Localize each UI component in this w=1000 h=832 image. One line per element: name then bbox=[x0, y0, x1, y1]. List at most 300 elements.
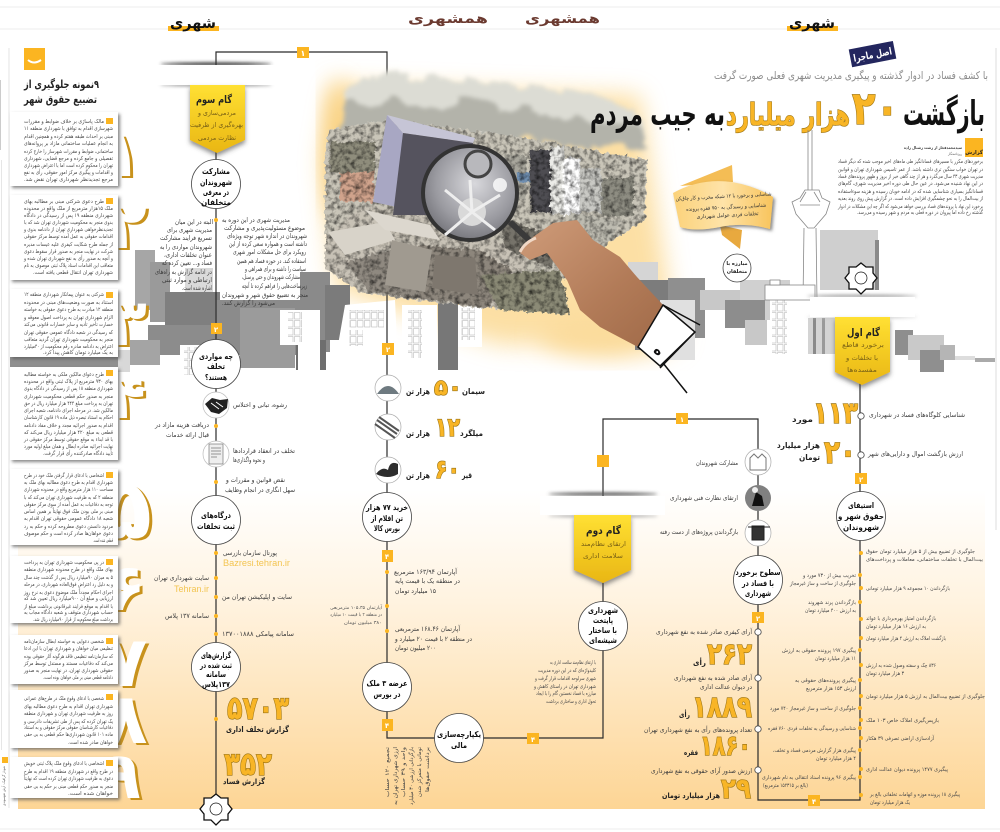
badge on bottom rail: ۴ bbox=[531, 736, 536, 744]
list: right column, left of rail: تخریب بیش از ۷۳۰ مورد و bbox=[802, 573, 856, 579]
list: right column, right of rail: بازپس‌گیری املاک خاص ۱۰۳ ملک bbox=[866, 717, 939, 724]
stats: step one: ۱۱۳ bbox=[813, 396, 858, 431]
card 6: با اقدام به موقع فرایند غیرقانونی برداشت مبلغ از bbox=[23, 604, 113, 610]
list: portals: سامانه پیامکی ۱۳۷۰۰۱۸۸۸ bbox=[222, 630, 294, 638]
card 3: که رسیدگی در شعبه دادگاه عمومی حقوقی تهران bbox=[24, 329, 113, 336]
icon: handshake bbox=[203, 392, 229, 418]
card 9 bbox=[10, 757, 118, 798]
label: law breaches bbox=[214, 476, 295, 494]
circle: glass municipality: پایتخت bbox=[593, 616, 613, 625]
card 7 bbox=[10, 635, 118, 684]
card 2: اقدامات حقوقی به عمل آمده توسط مرکز حقوقی bbox=[24, 233, 113, 240]
stats: step one: هزار میلیارد bbox=[777, 441, 820, 450]
text block: left of rail: تسریع فرایند مشارکت bbox=[160, 234, 212, 242]
band and banner: step one: گام اول bbox=[847, 326, 881, 339]
report intro: گزارش bbox=[965, 149, 983, 156]
badge: ۴ bbox=[385, 722, 390, 730]
list: right column, right of rail: آزادسازی اراضی تصرفی ۳۹ هکتار bbox=[865, 735, 934, 742]
list: apartments: در منطقه ۲ با قیمت ۱۰ میلیارد bbox=[330, 612, 382, 618]
card 8: خواهان صادر شده است. bbox=[68, 740, 113, 746]
safe bbox=[373, 115, 403, 207]
list: right column, left of rail: پیگیری پرونده‌های حقوقی به bbox=[795, 677, 856, 684]
headline bbox=[590, 81, 985, 135]
list: right column, right of rail: به ارزش ۱۶ هزار میلیارد تومان bbox=[866, 624, 926, 630]
circle: citizens' participation: شهروندان bbox=[200, 178, 232, 187]
card 6: حساب شهرداری متوقف و شعبه دادگاه مجاب به bbox=[24, 609, 113, 616]
circle: restoring rights: حقوق شهر و bbox=[837, 512, 884, 521]
card 4: منجر به صدور حکم قطعی محکومیت شهرداری bbox=[24, 393, 113, 400]
list: apartments: آپارتمان ۱۶۳/۹۴ مترمربع bbox=[394, 567, 458, 576]
circle: levels of confronting corruption: با فساد در bbox=[741, 579, 774, 588]
big outlined digits behind cards: ۸ bbox=[105, 678, 147, 760]
big outlined digits behind cards: ۴ bbox=[109, 363, 145, 433]
list: right column, left of rail: جلوگیری از ساخت و ساز غیرمجاز ۷۴۰ مورد bbox=[770, 705, 856, 712]
circle: financial integration: مالی bbox=[451, 741, 467, 750]
card 2: و آنچه به صدور رأی به نفع شهرداری تهران شده و bbox=[23, 254, 113, 262]
circle: citizens' participation bbox=[192, 160, 240, 208]
list: apartments bbox=[330, 567, 472, 652]
card 6: در پی محکومیت شهرداری تهران به پرداخت bbox=[24, 559, 104, 566]
list: right column, left of rail: (بالغ بر ۱۵۲۳۱۵ مترمربع) bbox=[763, 783, 808, 789]
stats: court rulings: ۲۶۲ bbox=[707, 637, 752, 672]
row: rebar: میلگرد bbox=[460, 428, 483, 438]
card 1: شهرسازی اقدام به توافق با شهرداری منطقه ۱۱ bbox=[24, 126, 113, 132]
list: portals: سایت و اپلیکیشن تهران من bbox=[222, 593, 292, 601]
text block: step two: با ارتقای نظام‌مند سلامت اداری به bbox=[550, 660, 596, 666]
yellow ribbon callout: شناسایی و برخورد با ۱۲ شبکه مخرب و کار چاق‌کن bbox=[675, 191, 772, 202]
circle: purchase from commodity exchange: تن اقلام از bbox=[370, 514, 403, 523]
stats: step one bbox=[777, 396, 965, 471]
tag: the main story bbox=[849, 41, 896, 67]
label: bribery: رشوه، تبانی و اختلاس bbox=[233, 401, 287, 409]
list: right column, left of rail: پیگیری ۹۶ پرونده اسناد انتقالی به نام شهرداری bbox=[762, 774, 856, 781]
card 9: خواهان شده است. bbox=[68, 791, 113, 797]
card 5: منطقه ۲ که به ظرفیت شهرداری تهران می‌کند که با bbox=[24, 494, 113, 501]
text block: right of rail: می‌شود را گزارش کنند. bbox=[222, 299, 275, 307]
top middle rail badge: ۱ bbox=[680, 416, 684, 424]
card 3 bbox=[10, 289, 118, 357]
yellow ribbon callout bbox=[673, 165, 773, 249]
circle: reporting portals: درگاه‌های bbox=[201, 510, 231, 520]
list: right column, left of rail: پیگیری ۱۹۷ پرونده حقوقی به ارزش bbox=[782, 647, 856, 654]
big outlined digits behind cards: ۹ bbox=[104, 741, 144, 816]
list: right column, left of rail: ۱۱ هزار میلیارد تومان bbox=[815, 656, 856, 662]
card 3: استناد به صورت وضعیت‌های مبنی در محدوده bbox=[24, 300, 113, 306]
circle: registered reports: ثبت شده در bbox=[199, 661, 232, 670]
rotated text: بازگردانی ارزشی ۳۰ میلیارد bbox=[408, 747, 415, 805]
card 1: به انجام عملیات ساختمانی مازاد بر پروانه‌های bbox=[24, 141, 113, 147]
card 2: شهرداری منطقه ۱۹ پس از رسیدگی در دادگاه bbox=[24, 212, 113, 219]
hand bbox=[520, 220, 663, 347]
list: apartments: در منطقه یک با قیمت پایه bbox=[395, 577, 460, 585]
text block: step two: تحول اداری و ساختاری برداشت bbox=[546, 699, 596, 705]
card 1: تهران را محکوم کرده است اما با اعتراض شهرداری bbox=[24, 162, 113, 169]
card 7: دادنامه قطعی مبنی بر ملی خواهان بوده است. bbox=[43, 675, 113, 681]
big outlined digits behind cards: ۲ bbox=[110, 191, 150, 266]
list: right column, left of rail: بازگرداندن پرند شهروند bbox=[808, 599, 856, 606]
skyline: white foreground left bbox=[180, 300, 482, 378]
text block: step two: شهری سرلوحه اقدامات قرار گرفت و bbox=[534, 675, 596, 682]
stats: court rulings: رأی bbox=[679, 709, 690, 719]
top middle rail badge bbox=[676, 413, 688, 424]
text block: left of rail: اشاره شده است. bbox=[182, 284, 212, 292]
row: cement bbox=[375, 375, 485, 401]
label: extra fee: قبال ارائه خدمات bbox=[166, 431, 209, 439]
card 4: طرح دعوای مالکین ملکی به خواسته مطالبه bbox=[24, 371, 104, 378]
row: cement: هزار تن bbox=[406, 387, 430, 396]
stats: court rulings: در دیوان عدالت اداری bbox=[700, 683, 752, 691]
card 1: مالک پاساژی بر خلاف ضوابط و مقررات bbox=[24, 118, 104, 125]
list: apartments: ۳۸۰ میلیون تومان bbox=[344, 620, 382, 626]
report intro: سیدمحمدفخار از رشت رشتال زاده bbox=[904, 145, 962, 150]
card 1: مرجع تجدیدنظر شهرداری تهران نقض شد. bbox=[24, 177, 113, 183]
stats: court rulings: آرای کیفری صادر شده به نفع شهرداری bbox=[656, 627, 753, 636]
magnifier bbox=[423, 146, 545, 255]
icon: yellow square bbox=[24, 48, 45, 70]
list: right column, right of rail: جلوگیری از تضییع بیت‌المال به ارزش ۵ هزار میلیارد تومان bbox=[866, 693, 985, 700]
card 2: ملک ۱۵هزار مترمربع از ملک واقع در محدوده bbox=[24, 205, 113, 212]
stat: 352 corruption reports: ۳۵۲ bbox=[224, 745, 272, 783]
list: right column, right of rail: بیت‌المال با تخلفات ساختمانی، معاملات و پرداخت‌های bbox=[866, 557, 983, 563]
circle: restoring rights: استیفای bbox=[848, 501, 874, 510]
circle: registered reports: سامانه bbox=[206, 670, 226, 679]
card 3: خسارت تأخیر تأدیه و سایر خسارات قانونی می‌کند bbox=[24, 320, 113, 328]
card 4: با قد ابداء به موقع حقوقی توسط مرکز حقوقی در bbox=[23, 436, 113, 443]
glow behind collage bbox=[322, 80, 680, 357]
card 2: طرح دعوی شرکتی مبنی بر مطالبه بهای bbox=[24, 198, 104, 205]
stats: step one: شناسایی کلوگاه‌های فساد در شهرداری bbox=[869, 411, 965, 419]
label: contracts: تخلف در انعقاد قراردادها bbox=[233, 447, 295, 455]
text block: right of rail: مشارکت شهروندان و حتی پرسنل، bbox=[242, 273, 300, 281]
text block: step two bbox=[533, 660, 596, 705]
text block: right of rail: موضوع مسئولیت‌پذیری و مشارکت bbox=[224, 224, 305, 232]
report intro bbox=[837, 138, 983, 216]
yellow ribbon callout: شناسایی و رسیدگی به ۷۵۰ فقره پرونده bbox=[686, 202, 766, 213]
text block: right of rail: داشته است و همواره سعی کرده از این bbox=[229, 240, 307, 248]
card 1: و اقدامات و پیگیری مرکز امور حقوقی، رأی به نفع bbox=[24, 168, 113, 176]
circle: registered reports: گزارش‌های bbox=[201, 650, 231, 661]
skyline: centre and right bbox=[628, 230, 995, 372]
stats: court rulings: ۲۹ bbox=[721, 772, 751, 805]
row: cement: سیمان bbox=[462, 387, 485, 396]
card 6: ارزیابی و مبلغ آن ۹۰۰میلیارد ریال تعیین شد که bbox=[24, 595, 113, 602]
big outlined digits behind cards: ۵ bbox=[100, 460, 152, 559]
band and banner: step one: مفسده‌ها bbox=[847, 366, 877, 374]
big outlined digits behind cards: ۷ bbox=[108, 623, 150, 705]
circle: what are violations: تخلف bbox=[207, 362, 225, 371]
card 2: بدوی منجر به محکومیت شهرداری تهران شد که با bbox=[24, 219, 113, 226]
circle: glass municipality: شهرداری bbox=[588, 606, 618, 615]
text block: right of rail: منجر به تضییع حقوق شهر و شهروندان bbox=[222, 291, 308, 299]
icon: municipality logo top bbox=[845, 263, 877, 294]
row: rebar bbox=[375, 413, 483, 443]
circle: three properties on exchange bbox=[362, 662, 412, 712]
stats: court rulings: هزار میلیارد تومان bbox=[662, 791, 720, 800]
band and banner: step two: سلامت اداری bbox=[583, 552, 623, 560]
card 8: شهرداری تهران اقدام به طرح دعوی مطالبه بهای bbox=[24, 704, 113, 710]
stats: court rulings: ۱۸۸۹ bbox=[692, 690, 752, 725]
stats: court rulings: ارزش صدور آرای حقوقی به نفع شهرداری bbox=[651, 766, 752, 775]
connector rail bbox=[216, 52, 860, 810]
text block: right of rail: مدیریت شهری در این دوره به bbox=[222, 216, 290, 224]
crisp house roofs bbox=[328, 222, 395, 255]
card 5: دعوی خواهان‌ها صادر کرده است و حکم موصوف bbox=[24, 530, 113, 537]
card 4: بهای ۹۳۰ مترمربع از پلاک ثبتی واقع در محدوده bbox=[24, 378, 113, 385]
text block: left of rail: مدیریت شهری برای bbox=[167, 226, 212, 234]
stat: 5703 administrative violations: ۵۷۰۳ bbox=[227, 689, 289, 727]
title block bbox=[590, 41, 988, 135]
panel: nine examples bbox=[10, 48, 118, 798]
list: apartments: ۲۰۰ میلیون تومان bbox=[395, 644, 436, 652]
list: apartments: در منطقه ۲ با قیمت ۲۰ میلیارد و bbox=[394, 635, 472, 643]
page header strip: شهری bbox=[789, 14, 835, 32]
card 1: مبنی بر احداث طبقه هفتم کرده و همچنین اقدام bbox=[24, 133, 113, 140]
text block: right of rail: استفاده کند. در حوزه فساد هم همین bbox=[237, 257, 306, 265]
card 6: برداشت مبلغ محکوم‌به از قرار ۹۰میلیارد ریال شد. bbox=[33, 616, 113, 623]
card 5: شعبه ۱۸ دادگاه عمومی حقوقی تهران اقدام به bbox=[24, 515, 113, 522]
icon: Milad tower bbox=[765, 130, 830, 300]
text block: step two: شهرداری تهران در راستای کاهش و bbox=[533, 683, 596, 690]
badge bbox=[855, 473, 867, 484]
text block: left of rail bbox=[155, 218, 218, 292]
badge: ۴ bbox=[385, 553, 390, 561]
bottom right badge: ۴ bbox=[812, 798, 817, 806]
skyline: left bbox=[10, 250, 350, 372]
card 5 bbox=[10, 469, 118, 545]
list: right column, left of rail: شناسایی و رسیدگی به تخلفات فردی ۷۶۰ فقره bbox=[768, 725, 856, 732]
card 4 bbox=[10, 367, 118, 460]
row: bitumen: ۶۰ bbox=[435, 455, 460, 485]
circle: what are violations bbox=[192, 340, 240, 388]
band and banner: step one bbox=[807, 295, 917, 385]
left margin strip bbox=[0, 48, 9, 808]
card 9: در طرح واقع در شهرداری منطقه ۱۹ اقدام به طرح bbox=[24, 769, 113, 775]
band and banner: step three: گام سوم bbox=[196, 93, 233, 106]
text block: left of rail: البته در این میان bbox=[175, 218, 213, 226]
row: cement: ۵۰ bbox=[434, 376, 462, 401]
card 1 bbox=[10, 112, 118, 186]
heading: nine examples: ۹نمونه جلوگیری از bbox=[23, 78, 99, 91]
card 7: می‌کند که دفاعیات مستند و مستدل توسط مرکز bbox=[23, 660, 113, 667]
list: right column, right of rail bbox=[859, 548, 985, 806]
band and banner: step three: مردمی‌سازی و bbox=[197, 109, 236, 117]
photo collage: city, safe, magnifier, hand bbox=[325, 72, 700, 393]
text block: right of rail bbox=[222, 216, 308, 307]
big outlined digits behind cards: ۷ bbox=[105, 621, 147, 703]
circle: what are violations: هستند؟ bbox=[205, 373, 227, 382]
card 6: اجرای احکام مجدداً ملک موضوع دعوی به نرخ روز bbox=[23, 588, 113, 596]
list: right column, left of rail: ۴ هزار میلیارد تومان bbox=[816, 756, 856, 762]
stat: 352 corruption reports: گزارش فساد bbox=[223, 777, 266, 786]
list: right column, right of rail: بازگشت املاک به ارزش ۴ هزار میلیارد تومان bbox=[866, 635, 946, 642]
text block: right of rail: زیرساخت‌هایی را فراهم کرده تا آنچه bbox=[242, 281, 307, 290]
rotated text: تومانی با متمرکز شدن bbox=[416, 747, 423, 797]
card 2: تجدیدنظرخواهی شهرداری تهران از دادنامه بدوی و bbox=[23, 227, 113, 233]
circle: levels of confronting corruption: شهرداری bbox=[745, 589, 771, 598]
card 9: منجر به صدور حکم قطعی مبنی بر حکم به بی حقی bbox=[24, 783, 113, 790]
card 4: شهرداری منطقه ۱۸ پس از رسیدگی در دادگاه بدوی bbox=[24, 385, 113, 392]
text block: left of rail: در ادامه گزارش به راه‌های bbox=[155, 268, 212, 276]
card 6: و به دلیل رد اعتراض فوق‌العاده شهرداری، در مرحله bbox=[24, 582, 113, 588]
card 8 bbox=[10, 690, 118, 748]
top rail badge bbox=[297, 47, 309, 58]
heading: nine examples bbox=[23, 78, 99, 106]
icons and labels: municipal oversight: ارتقای نظارت فنی شهرداری bbox=[670, 494, 738, 502]
textured city bbox=[325, 120, 648, 315]
band and banner: step three bbox=[150, 62, 280, 153]
stats: step one: ارزش بازگشت اموال و دارایی‌های شهر bbox=[867, 450, 963, 458]
stats: court rulings: رأی bbox=[693, 657, 706, 667]
circle: fighting offenders: متخلفان bbox=[727, 269, 747, 275]
report intro: مدیریت شهری ۴۳ سال می‌گذرد و هر از چند گاهی خبر از بروز و ظهور پرونده‌های فساد bbox=[838, 173, 983, 180]
badge bbox=[382, 550, 393, 562]
circle: purchase from commodity exchange bbox=[362, 492, 412, 542]
badge on bottom rail bbox=[527, 733, 539, 744]
band and banner: step two: ارتقای نظام‌مند bbox=[581, 540, 626, 548]
big outlined digits behind cards: ۸ bbox=[108, 680, 150, 762]
circle: reporting portals bbox=[192, 496, 240, 544]
list: apartments: ۱۵ میلیارد تومان bbox=[395, 587, 436, 595]
stats: step one: ۲۰ bbox=[824, 433, 856, 471]
icon: municipality logo bbox=[200, 794, 232, 825]
card 5: مردود دانستن دعوی مطروحه کرده و حکم به رد bbox=[24, 523, 113, 530]
card 3: منجر به محکومیت شهرداری تهران گردید متعاقب bbox=[24, 336, 113, 343]
stats: court rulings: ۱۸۶۰ bbox=[700, 729, 751, 762]
card 6: ۵ به میزان ۹۰میلیارد ریال پس از گذشت چند سال bbox=[24, 574, 113, 581]
circle: financial integration: یکپارچه‌سازی bbox=[437, 730, 481, 739]
stats: court rulings: آرای صادر شده به نفع شهرداری bbox=[674, 673, 753, 682]
sleeve bbox=[638, 305, 700, 393]
list: portals: سایت شهرداری تهران bbox=[154, 574, 209, 582]
band and banner: step two: گام دوم bbox=[586, 524, 622, 537]
circle: three properties on exchange: عرضه ۳ ملک bbox=[366, 679, 408, 688]
list: right column, left of rail: جلوگیری از ساخت و ساز غیرمجاز bbox=[789, 580, 856, 587]
badge bbox=[752, 612, 764, 623]
circle: citizens' participation: در معرفی bbox=[203, 188, 229, 197]
circle: financial integration bbox=[434, 714, 484, 762]
report intro: روزنامه‌نگار bbox=[947, 151, 962, 156]
list: right column, right of rail: پیگیری ۱۸ پرونده موزه و اتهامات تخلفاتی بالغ بر bbox=[869, 791, 960, 798]
stat: 5703 administrative violations bbox=[214, 689, 289, 735]
label: contracts: و نحوه واگذاری‌ها bbox=[233, 456, 265, 464]
row: bitumen bbox=[375, 455, 472, 485]
card 4: تأیید دادگاه صادرکننده رأی قرار گرفت. bbox=[43, 449, 113, 457]
icons and labels: municipal oversight: بازگرداندن پروژه‌های از دست رفته bbox=[660, 528, 738, 536]
card 3: اعتراض به دادنامه صادره رقم محکومیت از ۴۰میلیارد bbox=[24, 343, 113, 350]
card 5: مساحت ۱۱۰ هزار مترمربع واقع در محدوده شهرداری bbox=[24, 487, 113, 493]
stats: step one: مورد bbox=[792, 415, 813, 424]
row: bitumen: هزار تن bbox=[406, 471, 430, 480]
text block: left of rail: ارتباطی و موارد ثبتی bbox=[162, 276, 212, 284]
card 8: دفاعیات کارشناسان حقوقی مرکز حقوقی و به استناد bbox=[24, 724, 113, 731]
heading: nine examples: تضییع حقوق شهر bbox=[23, 93, 97, 106]
list: apartments: آپارتمان ۱۰۵.۳۵ مترمربعی bbox=[330, 604, 383, 611]
card 5: شهرداری اقدام به طرح دعوی مطالبه بهای ملک به bbox=[24, 479, 113, 486]
row: bitumen: قیر bbox=[461, 471, 472, 480]
card 5: مبنی بر ملی بودن ملک فوق نهایتاً بر همین اساس bbox=[24, 507, 113, 515]
card 2: شرکت در نهایت منجر به صدور قرار سقوط دعوی bbox=[24, 248, 113, 255]
label: contracts bbox=[233, 447, 295, 464]
card 5: قطعی شده است. bbox=[93, 538, 113, 544]
list: right column, left of rail bbox=[762, 573, 862, 789]
stat: 5703 administrative violations: گزارش تخلف اداری bbox=[226, 724, 289, 735]
band and banner: step two bbox=[540, 455, 665, 583]
rotated text: ارزی شهرداری تهران به bbox=[393, 747, 399, 805]
card 7: تنظیمی میان خواهان و شهرداری تهران با این ادعا bbox=[24, 646, 113, 652]
card 5: اشخاصی با ادعای قرار گرفتن ملک خود در طرح bbox=[24, 472, 104, 479]
card 8: شخصی با ادعای وقوع ملک در طرح‌های عمرانی bbox=[24, 695, 104, 702]
big outlined digits behind cards: ۶ bbox=[109, 553, 149, 628]
circle: restoring rights bbox=[836, 492, 886, 540]
card 9: دعوی به ظرفیت شهرداری تهران کرده است که نهایتاً bbox=[24, 774, 113, 782]
card 2: از جمله طرح شکایت کیفری علیه عیسات مدیره bbox=[24, 241, 113, 248]
headline: به جیب مردم bbox=[590, 95, 725, 133]
rotated text: واحد و ۳۹ حساب bbox=[401, 746, 407, 797]
card 3: به یک میلیارد تومان کاهش پیدا کرد. bbox=[43, 349, 113, 356]
circle: registered reports: ۱۳۷پلاس bbox=[202, 680, 230, 690]
big outlined digits behind cards: ۱ bbox=[102, 117, 142, 192]
text block: left of rail: فساد و... تعیین کرده که bbox=[162, 259, 212, 267]
badge: ۲ bbox=[859, 476, 864, 484]
label: law breaches: نقض قوانین و مقررات و bbox=[225, 476, 285, 484]
card 4: تهران به پرداخت مبلغ ۴۴۴ هزار میلیارد ریال در حق bbox=[24, 401, 113, 407]
circle: levels of confronting corruption bbox=[734, 556, 782, 604]
circle: reporting portals: ثبت تخلفات bbox=[197, 522, 235, 531]
card 2: شهرداری تهران انتقال قطعی یافته است. bbox=[33, 270, 113, 276]
card 7: حقوقی شهرداری تهران، در نهایت منجر به صدور bbox=[23, 668, 113, 674]
big outlined digits behind cards: ۹ bbox=[101, 739, 141, 814]
peach gradient background panel bbox=[18, 490, 985, 809]
label: law breaches: سهل انگاری در انجام وظایف bbox=[225, 486, 295, 494]
circle: citizens' participation: متخلفان bbox=[201, 198, 231, 207]
left margin strip: نمودار گرافیک: آرش شهسوندی bbox=[1, 766, 6, 806]
list: portals: سامانه ۱۳۷ پلاس bbox=[165, 612, 209, 620]
card 4: نهایت اجرائیه صادره ابطال و همان مبلغ اولیه مورد bbox=[24, 444, 113, 450]
stats: court rulings: تعداد پرونده‌های رأی به نفع شهرداری تهران bbox=[644, 725, 752, 734]
card 8: یک تهران کرده که پس از طی تشریفات دادرسی و bbox=[23, 718, 113, 725]
card 2: متعاقب این اقدامات اسناد پلاک ثبتی موصوف به نام bbox=[24, 262, 113, 269]
circle: levels of confronting corruption: سطوح برخورد bbox=[736, 568, 781, 577]
circle: purchase from commodity exchange: خرید ۷۷ هزار bbox=[365, 503, 408, 512]
text block: right of rail: شهروندان در اندازه شهر توجه ویژه‌ای bbox=[227, 232, 307, 240]
circle: fighting offenders: مبارزه با bbox=[726, 261, 748, 267]
text block: left of rail: عنوان تخلفات اداری، bbox=[164, 251, 212, 259]
badge: ۲ bbox=[214, 326, 219, 334]
circle: citizens' participation: مشارکت bbox=[202, 167, 230, 176]
card 4: قطعی به مبلغ ۴۲۰ هزار میلیارد ریال می‌کند که bbox=[24, 429, 113, 436]
band and banner: step one: برخورد قاطع bbox=[842, 341, 884, 349]
top rail badge: ۱ bbox=[301, 49, 305, 58]
haze bbox=[345, 72, 640, 150]
card 3: منطقه ۱۲ مبادرت به طرح دعوی حقوقی به خواسته bbox=[24, 307, 113, 313]
text block: right of rail: رویکرد برای حل مشکلات امور شهری bbox=[233, 248, 306, 256]
circle: what are violations: چه مواردی bbox=[199, 352, 233, 361]
sleeve: ه bbox=[650, 342, 666, 360]
list: apartments: آپارتمان ۱۶۸.۴۶ مترمربعی bbox=[395, 624, 461, 633]
band and banner: step three: بهره‌گیری از ظرفیت bbox=[190, 120, 243, 129]
list: right column, left of rail: به ارزش ۴۰۰ میلیارد تومان bbox=[805, 608, 856, 614]
band and banner: step one: با تخلفات و bbox=[845, 354, 878, 362]
circle: three properties on exchange: در بورس bbox=[374, 690, 400, 700]
circle: purchase from commodity exchange: بورس کالا bbox=[374, 524, 400, 534]
headline: هزار میلیارد bbox=[726, 98, 850, 133]
big outlined digits behind cards: ۱ bbox=[105, 119, 145, 194]
text block: left of rail: شهروندان مواردی را به bbox=[160, 243, 212, 251]
big outlined digits behind cards: ۳ bbox=[110, 288, 150, 363]
list: portals: پورتال سازمان بازرسی bbox=[223, 549, 277, 557]
stats: step one: تومان bbox=[799, 453, 820, 462]
list: portals: Tehran.ir bbox=[174, 584, 209, 594]
